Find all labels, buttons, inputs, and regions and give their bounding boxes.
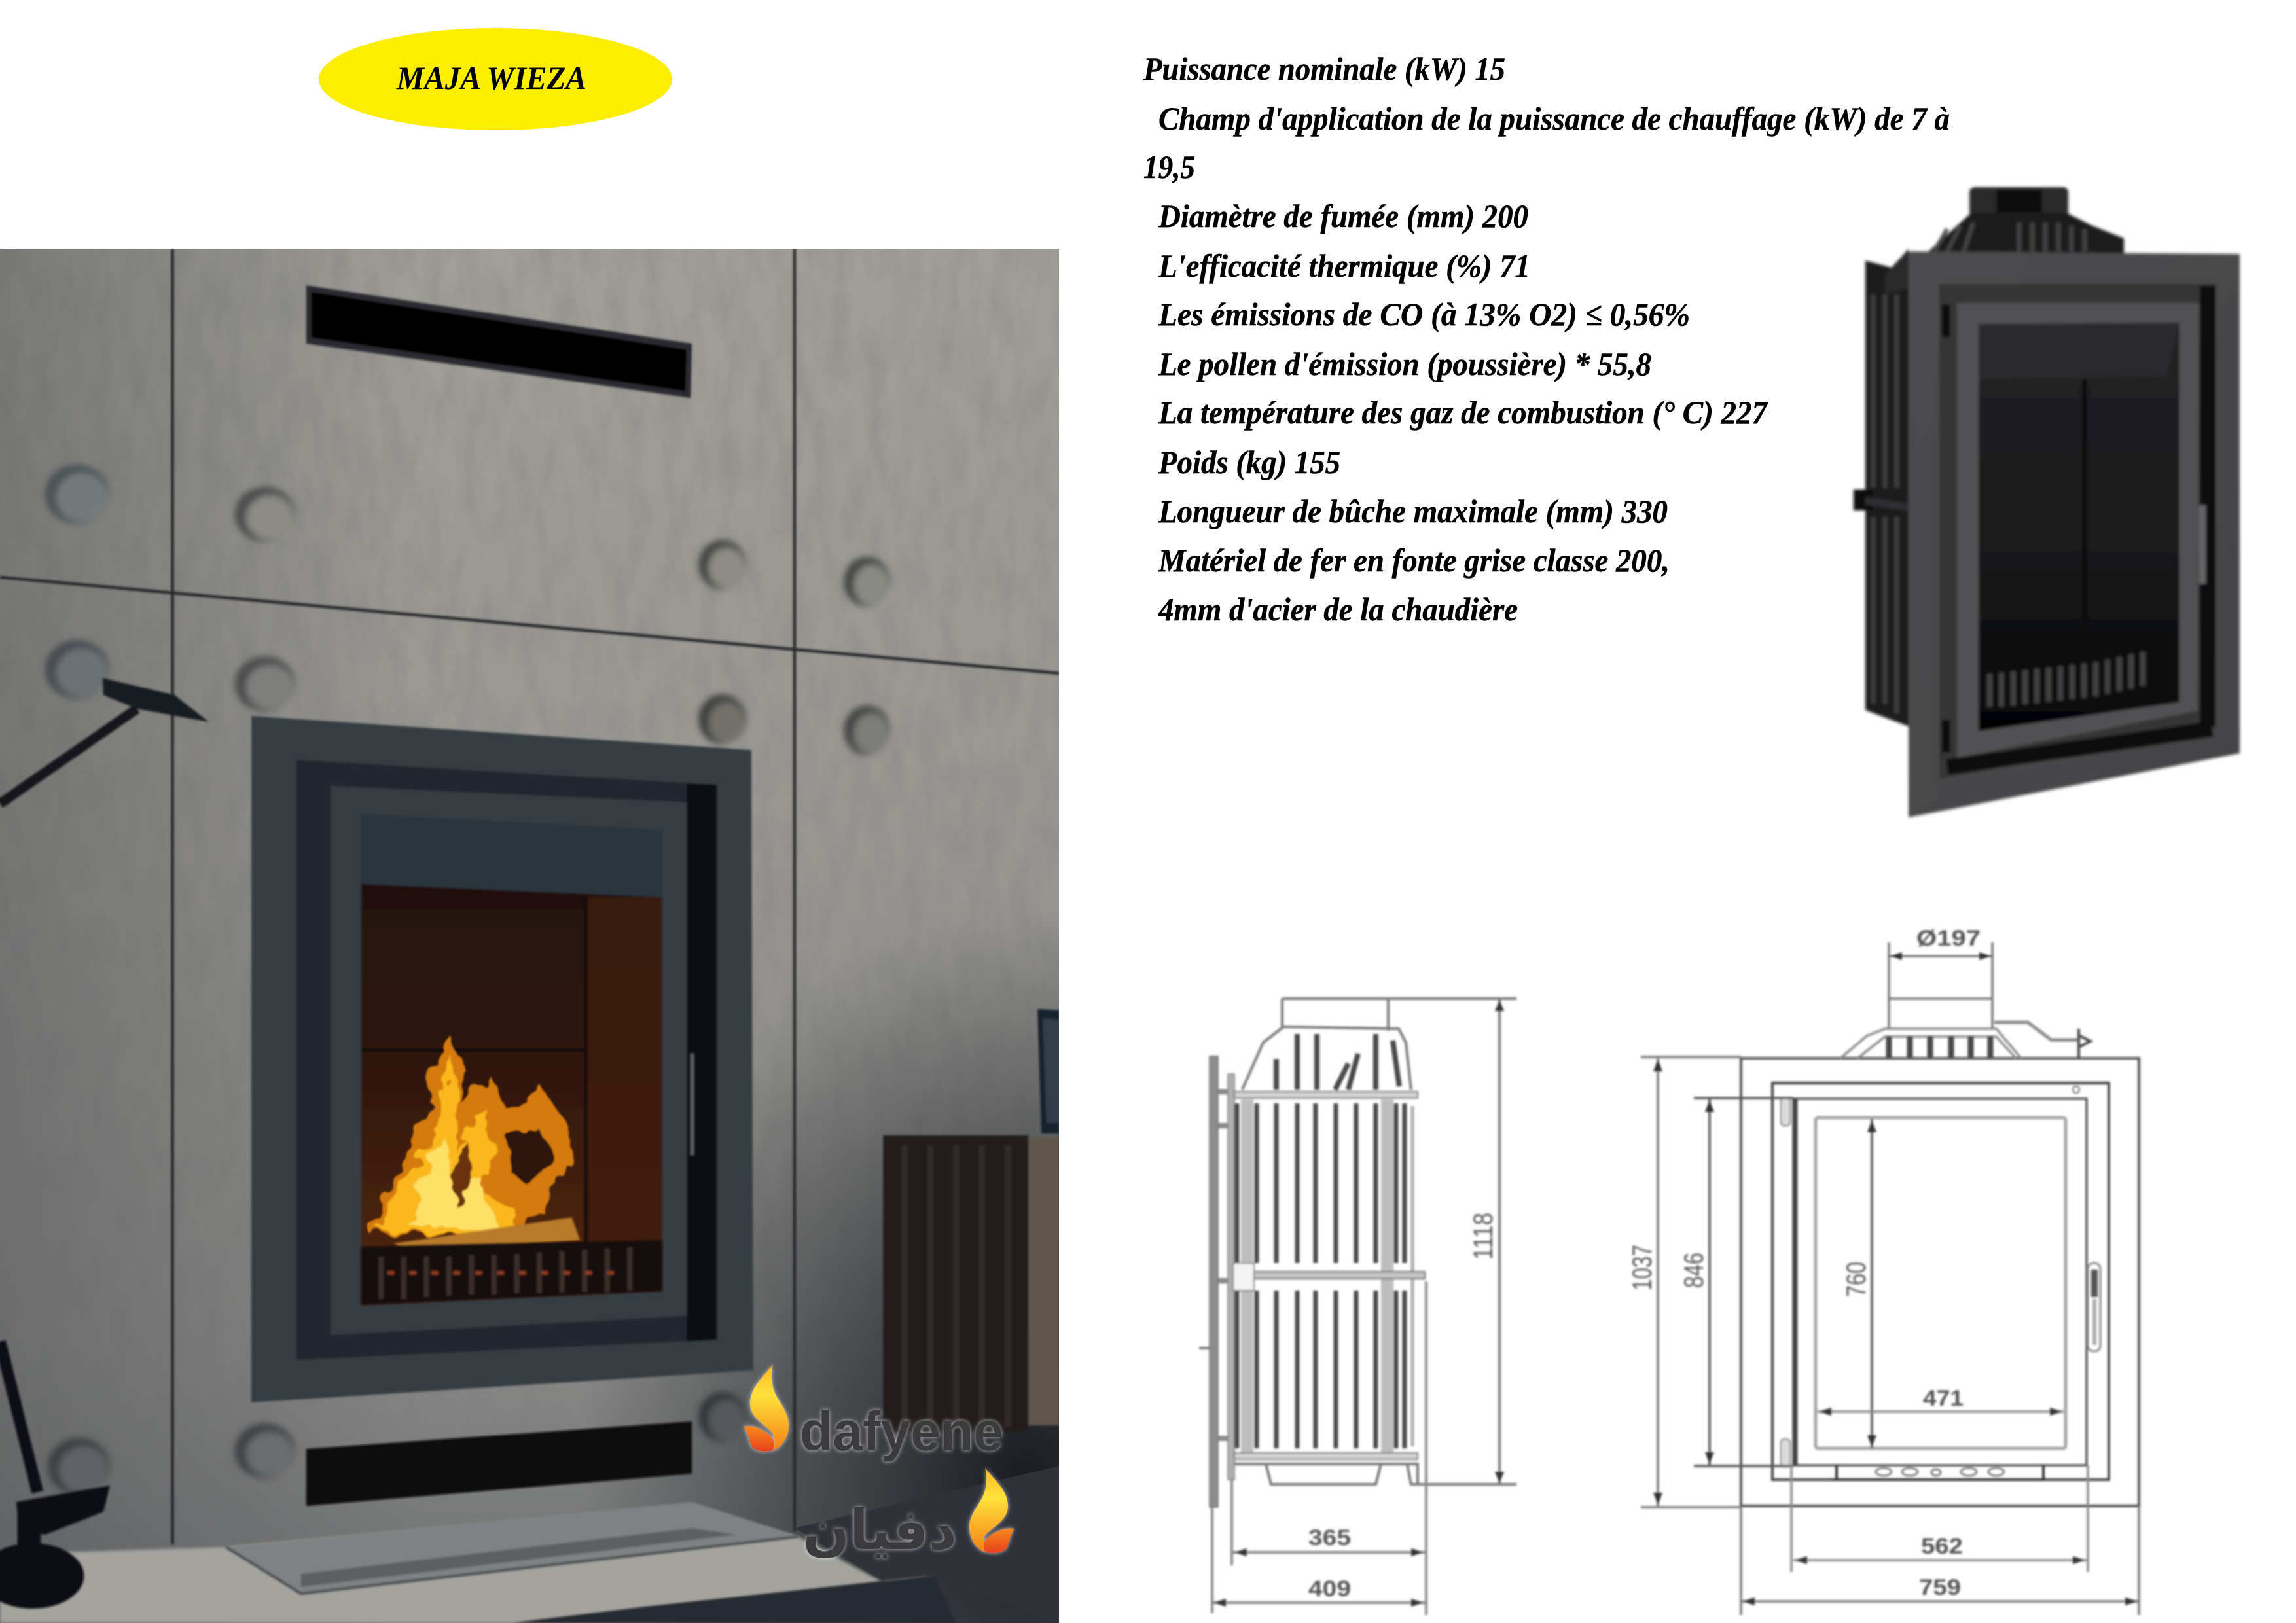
- door handle: [689, 1047, 696, 1165]
- cast top: [1924, 213, 2124, 255]
- dimension 759: [1741, 1506, 2139, 1615]
- side ribs: [1854, 249, 1909, 726]
- dimension 365: 365: [1308, 1525, 1351, 1550]
- specification text: Poids (kg) 155: [1158, 444, 1340, 480]
- inner recess: [296, 760, 717, 1360]
- door: [1793, 1099, 2087, 1465]
- logo: arabic wordmark: دفيان: [802, 1498, 957, 1562]
- foot: [1234, 1463, 1418, 1484]
- dimension 1037: [1626, 1057, 1741, 1507]
- dark right recess strip: [687, 783, 717, 1342]
- door frame: [331, 786, 687, 1335]
- product photo: cast iron insert: [1854, 187, 2240, 817]
- specification text: Champ d'application de la puissance de chauffage (kW) de 7 à: [1158, 100, 1950, 137]
- specification text: L'efficacité thermique (%) 71: [1158, 247, 1530, 284]
- flue and top: [1840, 942, 2090, 1058]
- dimension 471: 471: [1923, 1386, 1964, 1411]
- specification text: Matériel de fer en fonte grise classe 200,: [1158, 542, 1670, 579]
- outer plate: [1741, 1058, 2139, 1506]
- glass hearth plate: [226, 1502, 798, 1594]
- specification text: Le pollen d'émission (poussière) * 55,8: [1158, 346, 1651, 382]
- dimension 1118: [1282, 999, 1516, 1484]
- door frame: [1957, 303, 2199, 758]
- side elevation drawing: [1199, 999, 1516, 1615]
- log grate: [361, 1240, 662, 1305]
- floor: [0, 1522, 929, 1623]
- handle: [2088, 1263, 2100, 1351]
- title badge: [319, 28, 672, 130]
- dimension 760: 760: [1840, 1262, 1871, 1297]
- dimension diameter 197: Ø197: [1916, 926, 1981, 951]
- specification text: 4mm d'acier de la chaudière: [1158, 591, 1518, 628]
- fireplace insert: [251, 716, 753, 1402]
- dimension 1037: 1037: [1626, 1245, 1657, 1291]
- dimension 562: 562: [1921, 1534, 1963, 1559]
- dimension 760: [1840, 1119, 1876, 1448]
- recess dark edges: [1947, 285, 2212, 767]
- panel: room photo with fireplace: [0, 249, 1060, 1623]
- right dark floor and glass table: [796, 1466, 1059, 1593]
- logo: arabic flame: [969, 1468, 1014, 1553]
- dimension 1118: 1118: [1467, 1213, 1498, 1260]
- upper floor lamp: [0, 678, 209, 804]
- recess: [1939, 284, 2216, 779]
- specification text: Longueur de bûche maximale (mm) 330: [1158, 493, 1668, 529]
- dimension 759: 759: [1919, 1575, 1961, 1600]
- mounting plates: [1199, 1056, 1234, 1507]
- top air slot: [306, 285, 692, 398]
- fire: [370, 1033, 575, 1237]
- dimension diameter 197: [1889, 926, 1992, 960]
- top cap: [1242, 1027, 1411, 1090]
- concrete wall: [0, 249, 1060, 1623]
- carpet: [514, 1576, 956, 1623]
- firebrick joints: [586, 897, 662, 1264]
- lower lamp base: [0, 1342, 110, 1609]
- flue collar: [1969, 187, 2068, 217]
- hinges and handle: [1941, 304, 1950, 753]
- dimension 365: [1232, 1281, 1426, 1615]
- baffle: [361, 814, 662, 897]
- log: [394, 1217, 580, 1253]
- outer frame: [251, 716, 753, 1402]
- glass outline: [1816, 1118, 2066, 1448]
- specification text: Diamètre de fumée (mm) 200: [1158, 198, 1528, 234]
- door glass: [1979, 323, 2179, 731]
- dimension 409: [1212, 1507, 1425, 1613]
- grate bars: [1990, 652, 2143, 707]
- dimension 562: [1791, 1465, 2088, 1572]
- specification text: La température des gaz de combustion (° C) 227: [1158, 394, 1768, 431]
- rails: [1233, 1092, 1425, 1459]
- specification text: Puissance nominale (kW) 15: [1143, 50, 1505, 87]
- title badge: MAJA WIEZA: [396, 60, 586, 96]
- specification text: [1143, 50, 1950, 628]
- side furniture: [883, 1009, 1060, 1432]
- logo: dafyene flame: [744, 1364, 789, 1452]
- specification text: 19,5: [1143, 149, 1195, 185]
- dimension 846: [1678, 1098, 1793, 1466]
- dimension 846: 846: [1678, 1253, 1709, 1288]
- wall dimples: [45, 465, 890, 1495]
- body ribs: [1237, 1099, 1412, 1456]
- air controls: [1833, 1086, 2079, 1480]
- front plate: [1909, 251, 2240, 817]
- glass firebox: [361, 814, 662, 1305]
- inner frame: [1772, 1083, 2109, 1480]
- specification text: Les émissions de CO (à 13% O2) ≤ 0,56%: [1158, 296, 1690, 332]
- dimension 409: 409: [1308, 1577, 1351, 1601]
- dimension 471: [1818, 1386, 2064, 1416]
- front elevation drawing: [1626, 926, 2139, 1615]
- logo: dafyene wordmark: dafyene: [800, 1400, 1003, 1462]
- bottom air slot: [306, 1421, 692, 1506]
- hinges: [1781, 1098, 1790, 1467]
